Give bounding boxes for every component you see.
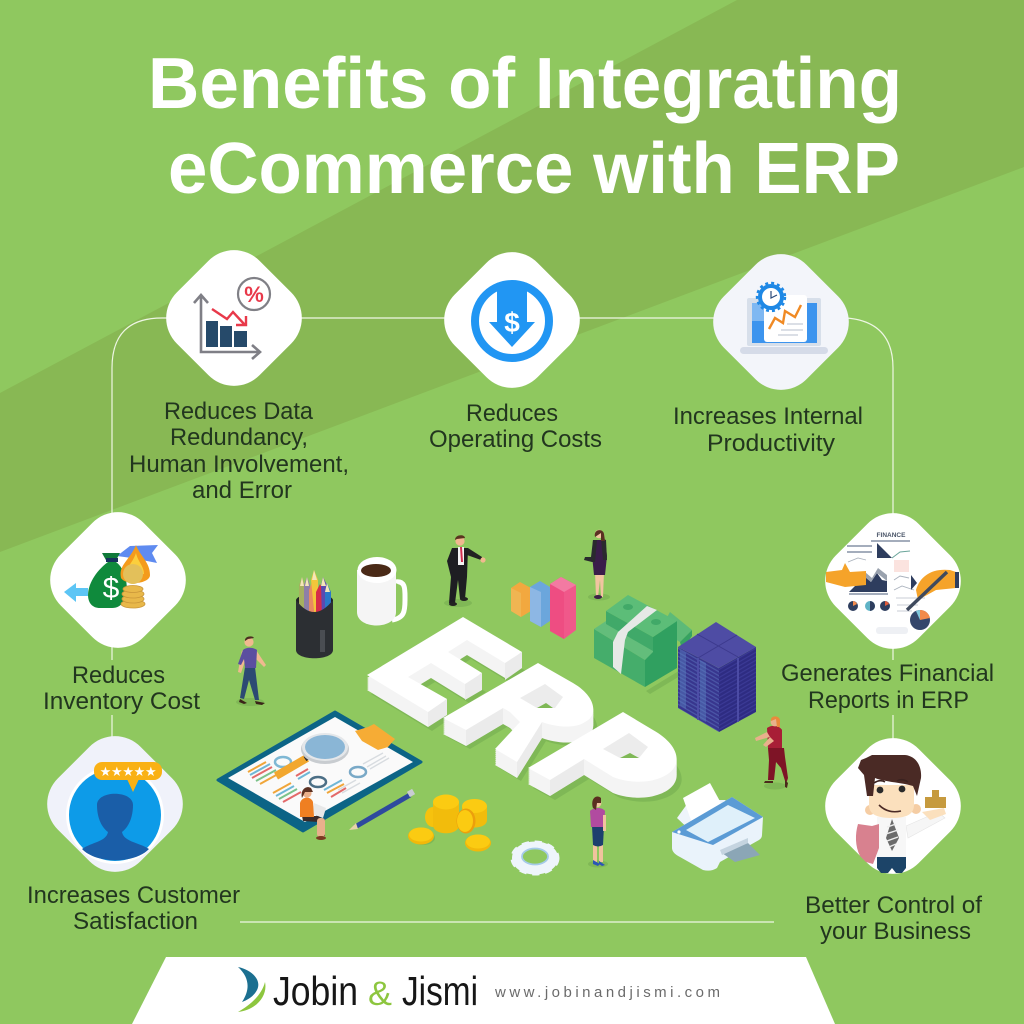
label: Better Control of xyxy=(805,892,982,919)
person: woman in black jacket xyxy=(584,530,610,600)
label xyxy=(781,660,994,714)
logo wordmark: Jobin xyxy=(273,968,358,1014)
gear xyxy=(513,843,557,873)
magnifier xyxy=(276,733,349,776)
label: Reports in ERP xyxy=(808,687,969,714)
icon: dollar down arrow: $ xyxy=(504,307,520,338)
person: man in black suit xyxy=(444,535,486,607)
label: Reduces Data xyxy=(164,398,314,425)
label: Increases Customer xyxy=(27,882,240,909)
icon: cartoon businessman with piggy bank and coins xyxy=(856,755,946,873)
label: Human Involvement, xyxy=(129,451,349,478)
panel: generates financial reports xyxy=(781,498,994,714)
label: Inventory Cost xyxy=(43,688,200,715)
panel: better control of your business xyxy=(805,723,982,945)
title: eCommerce with ERP xyxy=(168,129,900,209)
coffee mug xyxy=(357,557,405,626)
label xyxy=(673,403,863,457)
person: woman sitting with laptop xyxy=(300,787,326,840)
website url: www.jobinandjismi.com xyxy=(494,984,720,1001)
gold coins xyxy=(408,794,491,852)
title xyxy=(148,44,902,209)
label: Reduces xyxy=(466,400,558,427)
label: your Business xyxy=(820,918,971,945)
pencil cup xyxy=(296,570,333,658)
footer band xyxy=(132,957,835,1024)
panel: reduces inventory cost xyxy=(35,497,201,715)
diamond tile xyxy=(810,498,976,664)
label xyxy=(129,398,349,504)
connector lines xyxy=(112,318,893,922)
report charts xyxy=(248,762,346,802)
panel: reduces data redundancy xyxy=(129,235,349,504)
title: Benefits of Integrating xyxy=(148,44,902,124)
central isometric ERP illustration xyxy=(218,530,788,873)
label: Increases Internal xyxy=(673,403,863,430)
panel: reduces operating costs xyxy=(429,237,602,453)
icon: customer avatar with star rating xyxy=(66,762,164,864)
diamond tile xyxy=(429,237,595,403)
person: man walking in purple xyxy=(236,636,266,706)
person: woman in red suit xyxy=(755,716,788,790)
label xyxy=(805,892,982,945)
label: Reduces xyxy=(72,662,165,689)
label: Productivity xyxy=(707,430,835,457)
person: woman in pink top xyxy=(588,796,608,868)
logo wordmark: & xyxy=(368,975,392,1013)
icon: money bag with flame and coins xyxy=(64,545,158,608)
panel: increases customer satisfaction xyxy=(27,721,240,935)
diamond tile xyxy=(151,235,317,401)
stack of banknotes xyxy=(594,595,700,694)
icon: falling bar chart with percent xyxy=(194,278,270,359)
label: Operating Costs xyxy=(429,426,602,453)
diamond tile xyxy=(32,721,198,887)
label: Satisfaction xyxy=(73,908,198,935)
clipboard with report xyxy=(218,712,421,831)
diamond tile xyxy=(698,239,864,405)
label xyxy=(27,882,240,935)
label: Redundancy, xyxy=(170,424,308,451)
logo swoosh xyxy=(238,967,265,1012)
label xyxy=(43,662,200,715)
icon: customer avatar with star rating: ★★★★★ xyxy=(100,765,156,780)
letters ERP xyxy=(367,617,682,802)
icon: money bag with flame and coins: $ xyxy=(103,572,120,605)
icon: finance report with hands xyxy=(826,532,959,634)
diamond tile xyxy=(810,723,976,889)
clip xyxy=(355,724,395,750)
icon: finance report with hands: FINANCE xyxy=(877,532,906,539)
logo wordmark: Jismi xyxy=(402,968,478,1014)
diamond tile xyxy=(35,497,201,663)
logo wordmark xyxy=(273,968,478,1014)
printer xyxy=(672,783,763,871)
server rack xyxy=(678,622,756,732)
panel: increases internal productivity xyxy=(673,239,864,457)
label xyxy=(429,400,602,453)
icon: laptop with chart and gear xyxy=(740,283,828,354)
label: and Error xyxy=(192,477,292,504)
label: Generates Financial xyxy=(781,660,994,687)
diagonal darker band xyxy=(0,0,1024,552)
icon: dollar down arrow xyxy=(475,280,549,358)
icon: falling bar chart with percent: % xyxy=(244,282,264,307)
3D bar chart xyxy=(511,577,576,639)
pencil xyxy=(349,789,415,830)
